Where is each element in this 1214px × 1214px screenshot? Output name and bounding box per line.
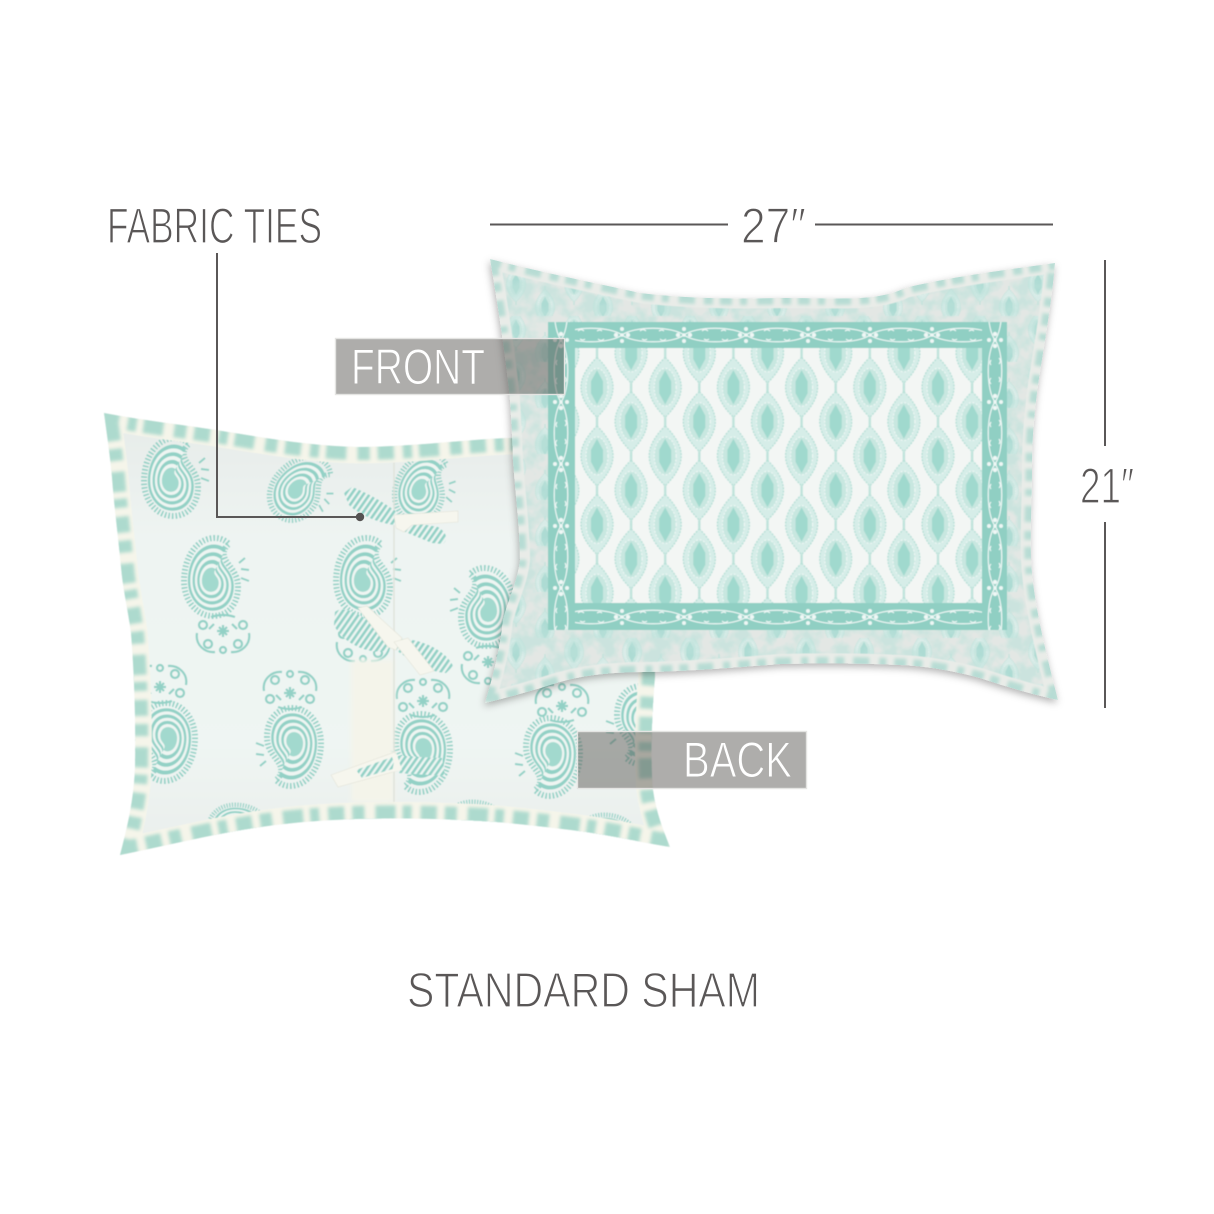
label: back: BACK	[683, 732, 792, 788]
heading: fabric ties: FABRIC TIES	[107, 198, 322, 254]
tie 3	[331, 752, 445, 787]
center medallion panel	[572, 345, 986, 605]
callout: fabric ties	[107, 198, 364, 521]
label: back	[578, 732, 806, 788]
outer printed border	[500, 273, 1044, 688]
leader dot	[356, 513, 364, 521]
dimension: height 21 inches: 21″	[1080, 458, 1134, 514]
label: front: FRONT	[351, 339, 485, 395]
back fabric body	[124, 433, 644, 834]
dimension: width 27 inches: 27″	[741, 198, 806, 254]
flange edge	[485, 259, 1058, 703]
leader line	[217, 253, 360, 517]
tie 2	[334, 606, 453, 675]
printed flange border	[104, 413, 670, 855]
center placket	[351, 452, 394, 810]
caption: standard sham: STANDARD SHAM	[407, 964, 760, 1018]
fabric ties	[331, 487, 458, 787]
pillow: back of sham	[100, 410, 675, 864]
pillow: front of sham	[480, 255, 1065, 710]
paisley print	[140, 438, 654, 836]
tie 1	[344, 487, 458, 544]
teal band frame	[548, 322, 1007, 630]
